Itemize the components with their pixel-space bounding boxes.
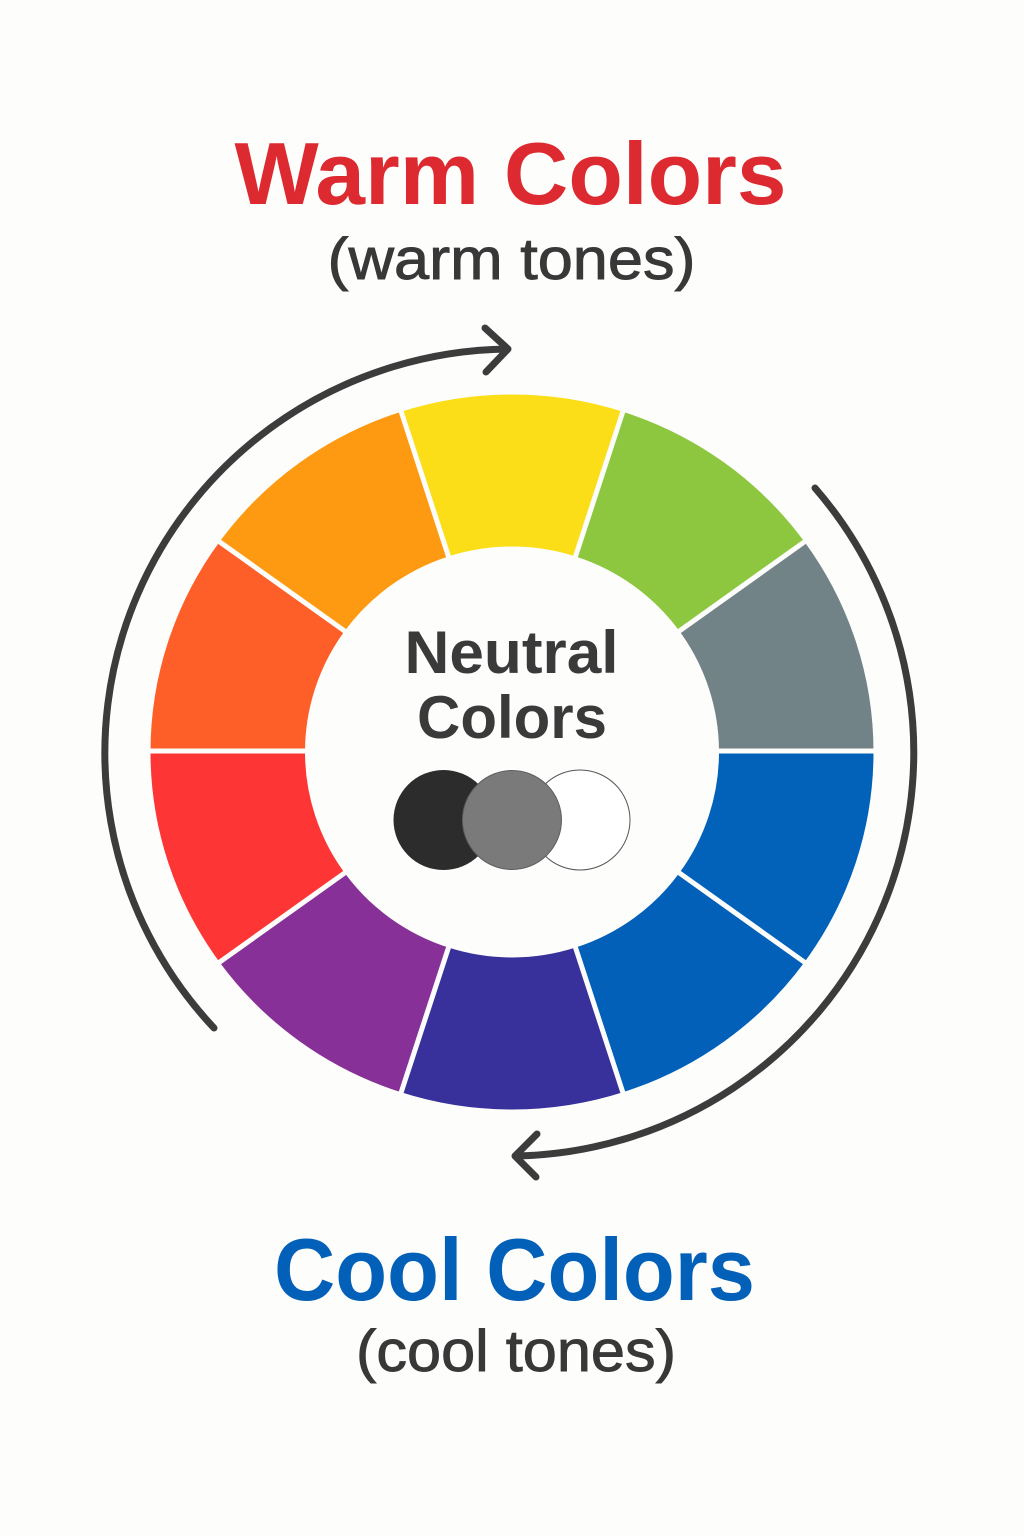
segment: purple [220, 873, 448, 1092]
segment: gray [680, 542, 874, 752]
segment: orange [220, 412, 448, 631]
segment: yellow [400, 395, 624, 557]
segment: deep blue [576, 873, 804, 1092]
segment: blue [680, 752, 874, 962]
segment: red [150, 752, 344, 962]
swatch: white [530, 770, 630, 870]
title: warm colors: Warm Colors [234, 124, 786, 223]
title: cool colors: Cool Colors [274, 1220, 755, 1319]
swatch: gray [462, 770, 562, 870]
segment: red-orange [150, 542, 344, 752]
neutral swatches [394, 770, 630, 870]
swatch: black [394, 770, 494, 870]
subtitle: warm tones: (warm tones) [328, 227, 696, 292]
heading: neutral colors: Neutral [404, 619, 618, 686]
heading: neutral colors: Colors [417, 684, 607, 751]
segment: indigo [400, 947, 624, 1109]
color wheel [146, 395, 878, 1109]
arrow: cool direction [515, 488, 914, 1177]
segment: green [576, 412, 804, 631]
heading: neutral colors [404, 619, 618, 751]
arrow: warm direction [105, 328, 508, 1028]
subtitle: cool tones: (cool tones) [356, 1319, 676, 1384]
